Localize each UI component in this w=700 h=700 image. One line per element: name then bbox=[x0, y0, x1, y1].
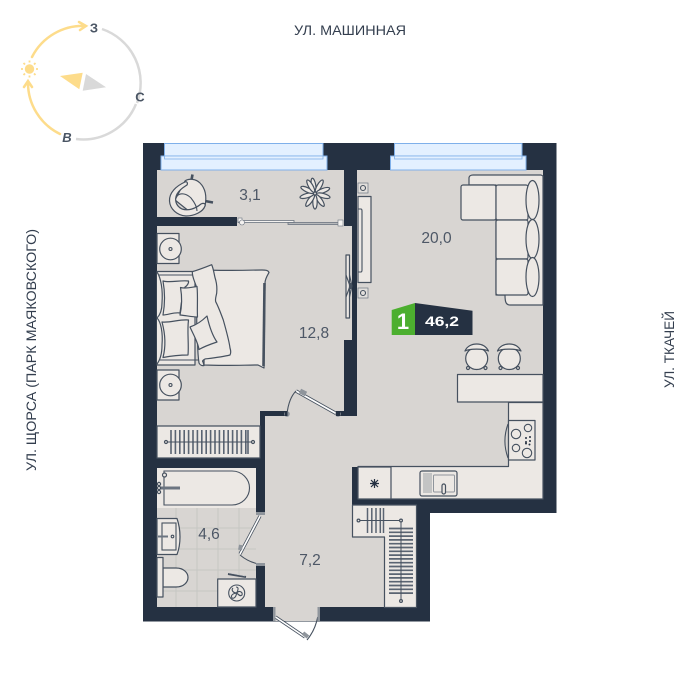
washbasin bbox=[157, 518, 180, 554]
bedroom wall TV bbox=[346, 255, 352, 318]
headboard cushions bbox=[157, 272, 162, 364]
area label: bedroom: 12,8 bbox=[299, 325, 329, 342]
pillow 1 bbox=[163, 281, 189, 315]
entrance door bbox=[273, 607, 320, 640]
bedside table top bbox=[157, 234, 181, 264]
kitchen counter bbox=[358, 402, 543, 499]
floor: hall bbox=[265, 416, 352, 607]
pillow 3 bbox=[162, 320, 188, 358]
window: living room bbox=[390, 144, 526, 170]
toilet bbox=[157, 558, 188, 597]
stove bbox=[505, 420, 535, 460]
TV unit bbox=[358, 183, 371, 298]
floor: loggia bbox=[157, 170, 344, 226]
entrance opening bbox=[275, 607, 318, 621]
blanket bbox=[192, 265, 231, 366]
wardrobe: bedroom bbox=[157, 426, 260, 458]
compass gray triangle bbox=[83, 74, 106, 91]
street label: west: УЛ. ЩОРСА (ПАРК МАЯКОВСКОГО) bbox=[24, 229, 39, 471]
outer wall mass bbox=[143, 143, 556, 622]
wardrobe: hall bbox=[352, 505, 416, 608]
bathtub bbox=[157, 468, 256, 508]
bathroom door bbox=[240, 512, 265, 566]
area label: loggia: 3,1 bbox=[239, 187, 261, 204]
dining chair left bbox=[465, 344, 488, 370]
compass gray arc bbox=[76, 29, 141, 139]
kitchen sink bbox=[420, 471, 457, 496]
compass letter east: С bbox=[135, 90, 145, 104]
washing machine bbox=[218, 573, 256, 607]
sofa bbox=[461, 175, 543, 305]
badge: rooms and total area: 46,2 bbox=[425, 313, 459, 329]
icon: plant bbox=[299, 178, 331, 209]
floor: bedroom bbox=[157, 226, 352, 426]
mattress bbox=[204, 270, 269, 368]
compass letter south: В bbox=[62, 130, 72, 145]
floor plan bbox=[143, 143, 556, 640]
bedroom door bbox=[284, 391, 341, 417]
pillow 2 bbox=[180, 286, 198, 317]
street label: east: УЛ. ТКАЧЕЙ bbox=[662, 311, 677, 388]
pillow 4 bbox=[190, 316, 217, 350]
street label: north: УЛ. МАШИННАЯ bbox=[294, 23, 406, 38]
icon: sun bbox=[21, 60, 38, 78]
area label: bathroom: 4,6 bbox=[198, 526, 220, 543]
bed bbox=[157, 265, 269, 368]
compass yellow triangle bbox=[60, 73, 83, 89]
bed frame bbox=[157, 272, 195, 365]
bedside table bottom bbox=[157, 370, 181, 400]
bathroom tiles bbox=[157, 508, 256, 607]
icon: hanging chair bbox=[169, 174, 213, 216]
floor: bathroom bbox=[157, 468, 256, 607]
area label: hall: 7,2 bbox=[299, 552, 321, 569]
dining chair right bbox=[498, 344, 521, 370]
compass yellow arcs bbox=[24, 22, 86, 134]
area label: living room: 20,0 bbox=[421, 230, 452, 247]
window: loggia bbox=[161, 144, 327, 170]
compass bbox=[21, 20, 145, 145]
compass letter west: З bbox=[90, 20, 98, 36]
badge: rooms and total area: 1 bbox=[397, 309, 409, 334]
floor: living room and kitchen bbox=[352, 170, 543, 499]
fridge bbox=[358, 467, 391, 499]
sliding door: loggia bbox=[238, 218, 343, 226]
badge: rooms and total area bbox=[392, 303, 472, 335]
bar counter bbox=[458, 374, 543, 402]
